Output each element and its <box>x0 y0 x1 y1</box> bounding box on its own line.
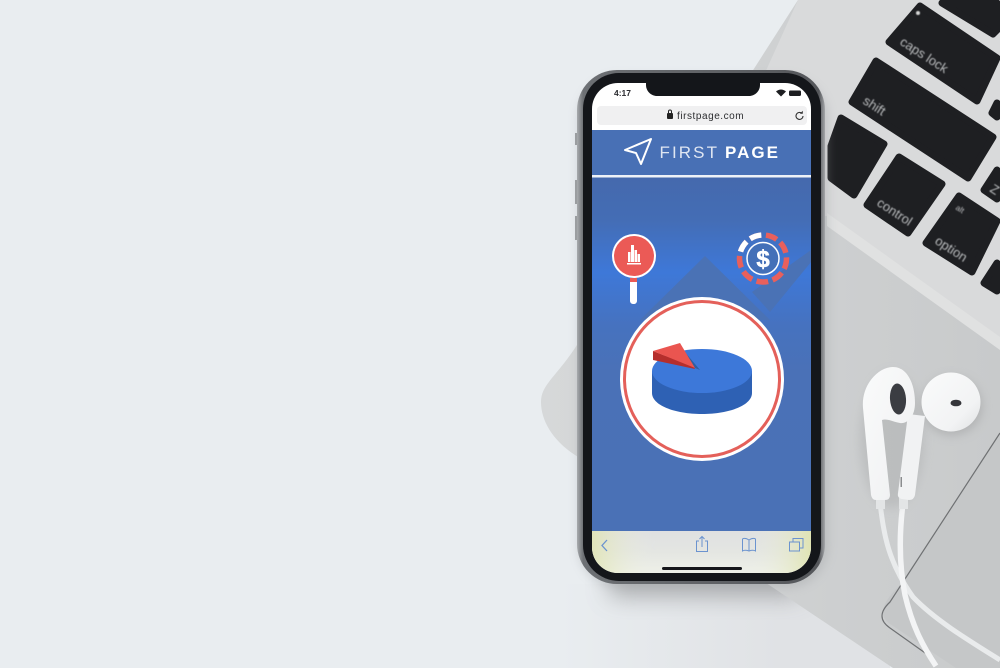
earphones <box>860 367 1000 666</box>
icon: dollar chip: $ <box>756 246 770 273</box>
key labels: shift <box>860 93 889 119</box>
key labels <box>860 11 1000 265</box>
bottom-right desk surface <box>560 584 890 668</box>
url bar <box>597 106 807 125</box>
key labels: control <box>874 195 915 229</box>
pie chart badge <box>620 297 784 461</box>
status bar <box>614 88 801 98</box>
phone <box>575 70 825 584</box>
browser toolbar <box>592 531 811 573</box>
pie chart <box>652 343 752 414</box>
icon: dollar chip <box>736 232 790 285</box>
mountains <box>640 250 811 320</box>
status bar: 4:17 <box>614 88 631 98</box>
logo header: FIRST <box>660 143 719 162</box>
logo header <box>625 139 780 164</box>
key labels: alt <box>954 203 967 216</box>
phone screen <box>592 83 811 573</box>
key labels: option <box>932 233 970 265</box>
notch <box>646 83 760 96</box>
icon: magnifier <box>612 234 656 304</box>
phone frame <box>577 70 825 584</box>
logo header: PAGE <box>725 143 780 162</box>
scene: phone on laptop <box>541 0 1000 668</box>
screen background <box>592 130 811 177</box>
phone shadow <box>578 76 828 588</box>
phone cast shadow on desk <box>610 572 800 596</box>
side buttons <box>575 133 578 240</box>
key labels: caps lock <box>897 34 951 76</box>
keyboard keys <box>831 3 997 291</box>
url bar: firstpage.com <box>677 111 744 122</box>
laptop body <box>541 0 1000 668</box>
